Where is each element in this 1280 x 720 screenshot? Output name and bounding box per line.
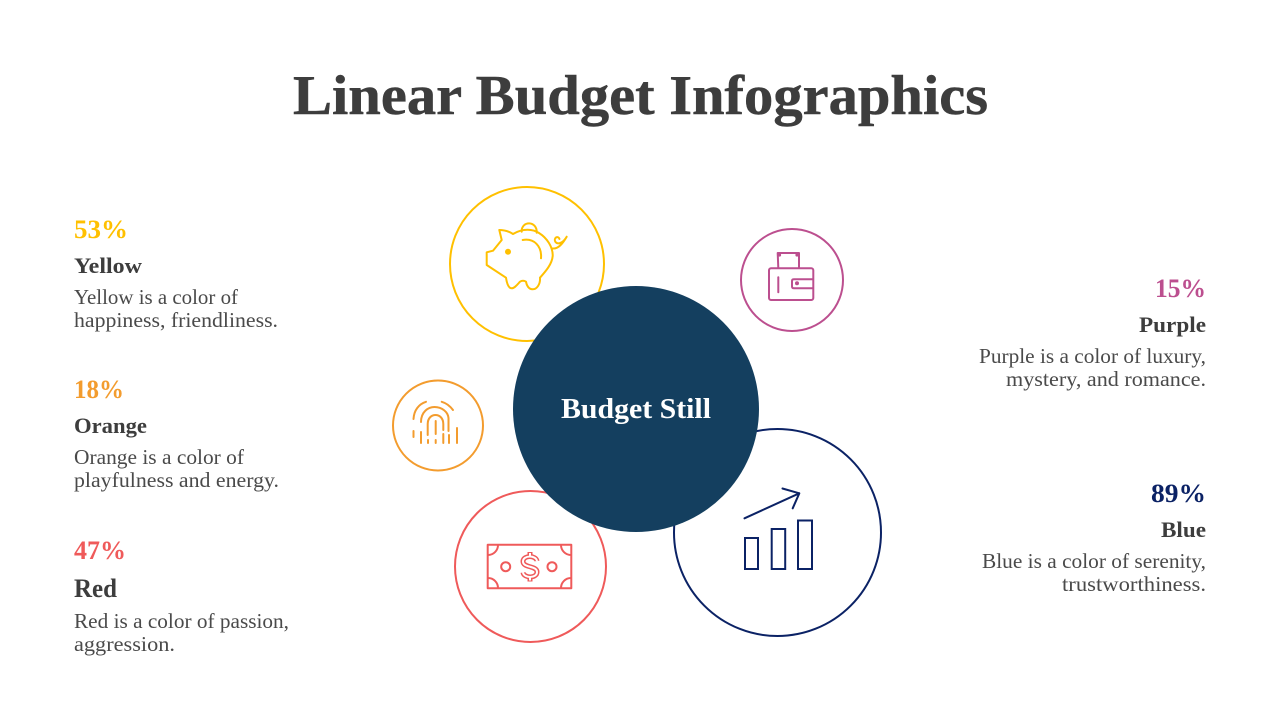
panel: orange text block: [74, 375, 279, 492]
panel: blue text block: [982, 479, 1206, 596]
panel: blue text block: trustworthiness.: [1062, 572, 1206, 596]
yellow percentage: 53%: [74, 215, 128, 244]
panel: red text block: aggression.: [74, 632, 175, 656]
central circle: Budget Still: Budget Still: [561, 394, 711, 425]
orange description: Orange is a color of: [74, 445, 244, 469]
yellow description: Yellow is a color of: [74, 285, 238, 309]
purple heading: Purple: [1139, 312, 1206, 337]
panel: yellow text block: happiness, friendliness.: [74, 308, 278, 332]
purple percentage: 15%: [1155, 274, 1206, 303]
blue heading: Blue: [1161, 517, 1206, 542]
panel: purple text block: [979, 274, 1206, 391]
red heading: Red: [74, 574, 118, 603]
red percentage: 47%: [74, 536, 126, 565]
orange heading: Orange: [74, 413, 147, 438]
blue circle: [674, 429, 881, 636]
red description: Red is a color of passion,: [74, 609, 289, 633]
central circle: Budget Still: [513, 286, 759, 532]
purple circle: [741, 229, 843, 331]
icon: fingerprint: [414, 402, 457, 443]
blue percentage: 89%: [1151, 479, 1206, 508]
purple description: Purple is a color of luxury,: [979, 344, 1206, 368]
panel: yellow text block: [74, 215, 278, 332]
yellow heading: Yellow: [74, 253, 142, 278]
orange circle: [393, 380, 483, 470]
icon: wallet: [769, 253, 813, 300]
icon: piggy bank: [487, 223, 567, 289]
panel: purple text block: mystery, and romance.: [1006, 367, 1206, 391]
blue description: Blue is a color of serenity,: [982, 549, 1206, 573]
panel: orange text block: playfulness and energy.: [74, 468, 279, 492]
title: Linear Budget Infographics: [293, 65, 988, 127]
icon: rising bar chart with arrow: [744, 488, 812, 569]
yellow circle: [450, 187, 604, 341]
icon: banknote: [488, 545, 571, 588]
orange percentage: 18%: [74, 375, 124, 404]
panel: red text block: [74, 536, 289, 656]
red circle: [455, 491, 606, 642]
